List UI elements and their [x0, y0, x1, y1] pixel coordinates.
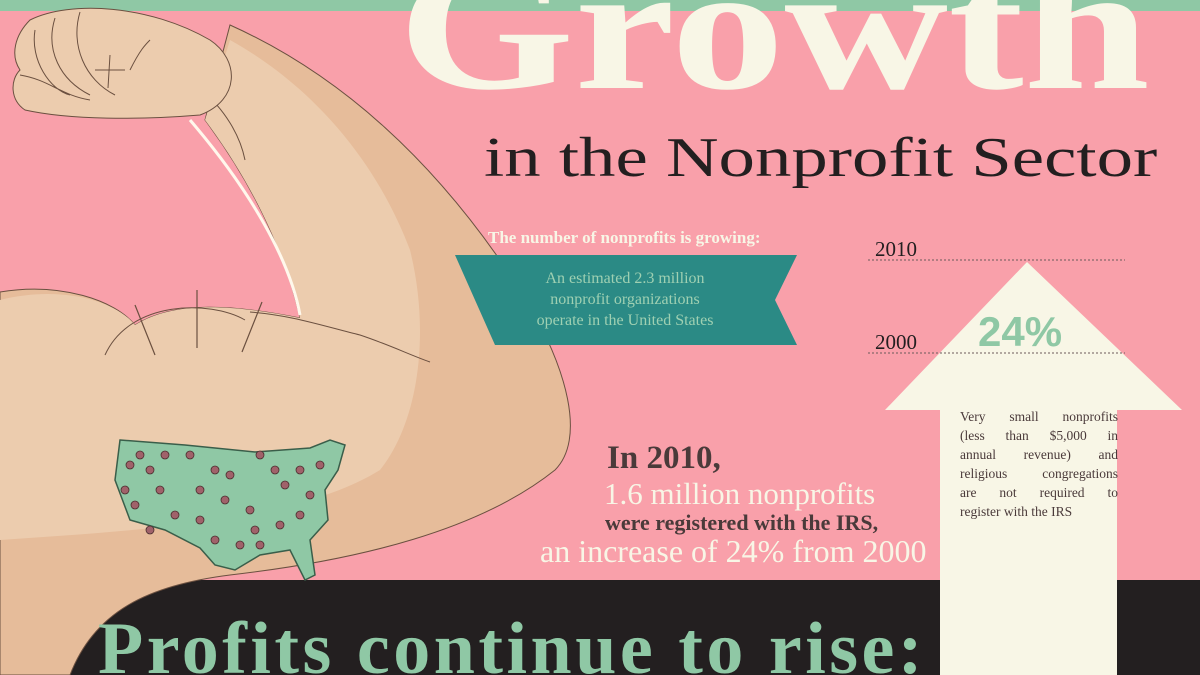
top green bar	[0, 0, 1200, 11]
text: In 2010 stats: an increase of 24% from 2000	[540, 533, 927, 569]
arrow: growth 24%: religious congregations	[960, 466, 1118, 481]
ribbon: 2.3 million: An estimated 2.3 million nonprofit organizations operate in the United States	[537, 270, 713, 329]
arrow: growth 24%: (less than $5,000 in	[960, 428, 1118, 443]
bottom dark band	[60, 580, 1200, 675]
arrow: growth 24%: 2010	[875, 237, 917, 261]
heading: number growing: The number of nonprofits is growing:	[488, 228, 761, 247]
arrow: growth 24%: register with the IRS	[960, 504, 1072, 519]
arrow: growth 24%: are not required to	[960, 485, 1118, 500]
arrow: growth 24%: 2000	[875, 330, 917, 354]
arrow: growth 24%: Very small nonprofits	[960, 409, 1118, 424]
illustration: flexed arm with US map	[0, 8, 571, 675]
arrow: growth 24%	[868, 237, 1182, 675]
text: In 2010 stats: were registered with the IRS,	[605, 510, 878, 535]
text: In 2010 stats	[540, 440, 927, 569]
icon: US map with pins	[115, 440, 345, 580]
ribbon: 2.3 million	[455, 255, 797, 345]
arrow: growth 24%: annual revenue) and	[960, 447, 1118, 462]
subtitle: in the Nonprofit Sector	[484, 127, 1157, 189]
fist	[13, 8, 231, 118]
arrow: growth 24%: 24%	[978, 308, 1062, 355]
text: In 2010 stats: 1.6 million nonprofits	[604, 476, 875, 511]
text: In 2010 stats: In 2010,	[607, 440, 721, 476]
